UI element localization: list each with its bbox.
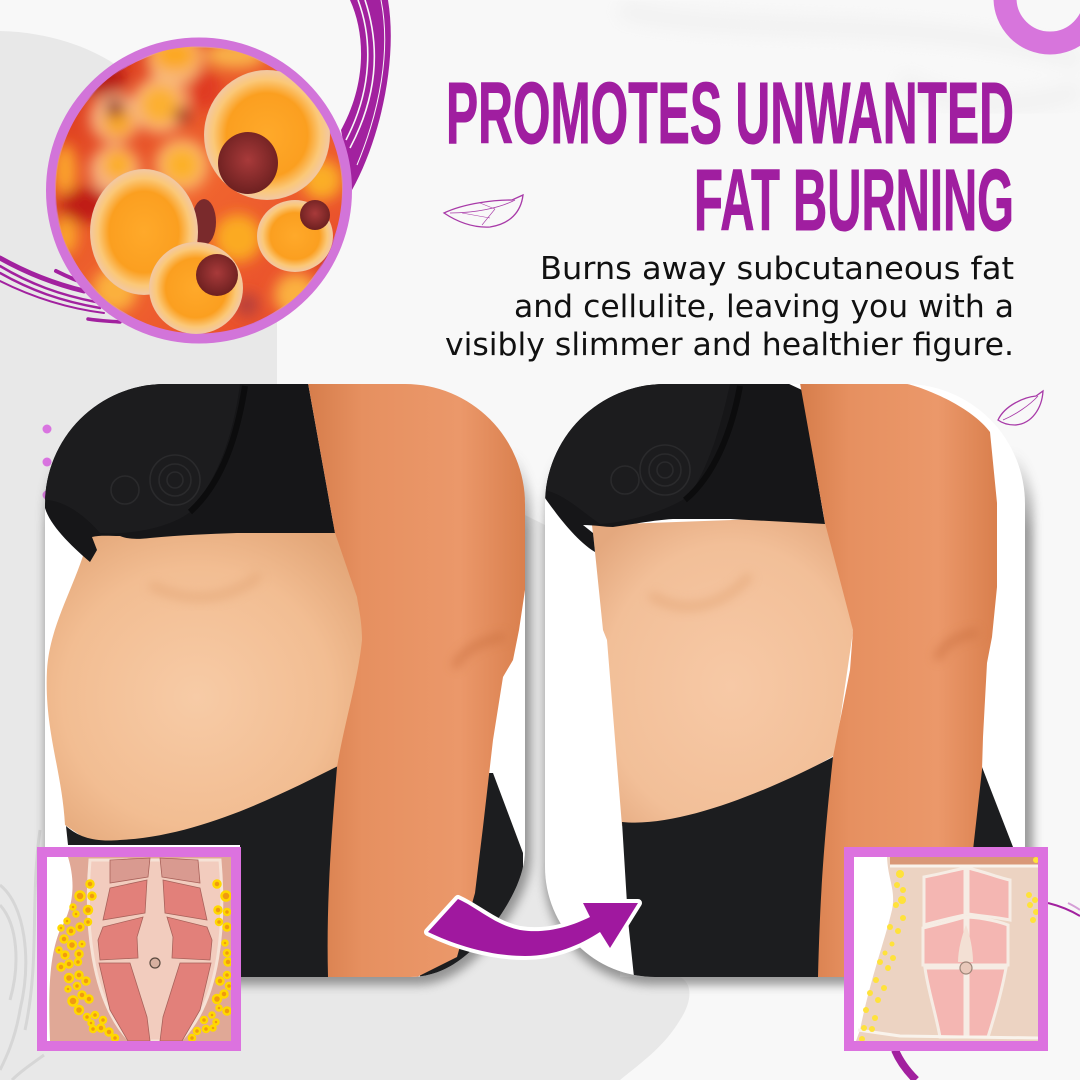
centre gap xyxy=(958,925,973,962)
pants xyxy=(622,757,835,977)
bra lace cup xyxy=(45,384,164,500)
small purple swirl right xyxy=(1048,903,1080,916)
torso xyxy=(49,857,231,1041)
bra xyxy=(45,383,335,562)
pants xyxy=(66,765,340,977)
torso xyxy=(856,857,1038,1041)
muscles xyxy=(98,858,212,1041)
subtitle text: and cellulite, leaving you with a xyxy=(514,289,1014,325)
fat dots xyxy=(859,857,1039,1042)
fat dots xyxy=(56,880,232,1041)
bra seam xyxy=(685,386,740,500)
belly skin slim xyxy=(592,515,870,826)
cell top right xyxy=(204,70,330,200)
subtitle text: visibly slimmer and healthier figure. xyxy=(445,327,1014,363)
bra xyxy=(545,383,825,552)
panel: before photo xyxy=(45,383,525,978)
belly crease shading xyxy=(650,575,750,606)
purple brush swirl behind circle xyxy=(0,0,391,322)
muscles xyxy=(923,868,1010,1037)
belly crease shading xyxy=(150,575,260,597)
cell bottom xyxy=(149,242,243,334)
icon: leaf outline right xyxy=(998,391,1043,425)
elbow crease xyxy=(937,632,978,660)
inset: after abdomen xyxy=(849,852,1043,1046)
icon: leaf outline near title xyxy=(444,195,523,227)
bra lace cup xyxy=(546,384,664,490)
navel xyxy=(150,958,160,968)
bra seam xyxy=(190,386,245,512)
subtitle text xyxy=(445,251,1014,363)
round photo: fat cells xyxy=(51,30,347,338)
cell right xyxy=(257,200,333,272)
top-right ring decoration xyxy=(1005,0,1080,43)
cell left xyxy=(90,169,216,295)
elbow crease xyxy=(455,636,505,668)
arm xyxy=(800,383,997,977)
grey background shape xyxy=(0,31,689,1080)
faint grey swirl top right xyxy=(620,10,1080,104)
subtitle text: Burns away subcutaneous fat xyxy=(540,251,1014,287)
arm xyxy=(308,383,525,977)
panel: after photo xyxy=(545,383,1025,978)
dots decoration xyxy=(42,424,84,500)
purple swirl bottom xyxy=(895,1050,916,1080)
panel shadow xyxy=(45,392,1033,985)
waist lines xyxy=(890,857,1038,865)
belly skin xyxy=(47,520,380,842)
title xyxy=(446,65,1014,249)
inset: before abdomen xyxy=(42,852,236,1046)
faint hair line decoration xyxy=(0,830,44,1080)
arrow xyxy=(428,899,638,956)
blurred background cells xyxy=(53,30,344,317)
